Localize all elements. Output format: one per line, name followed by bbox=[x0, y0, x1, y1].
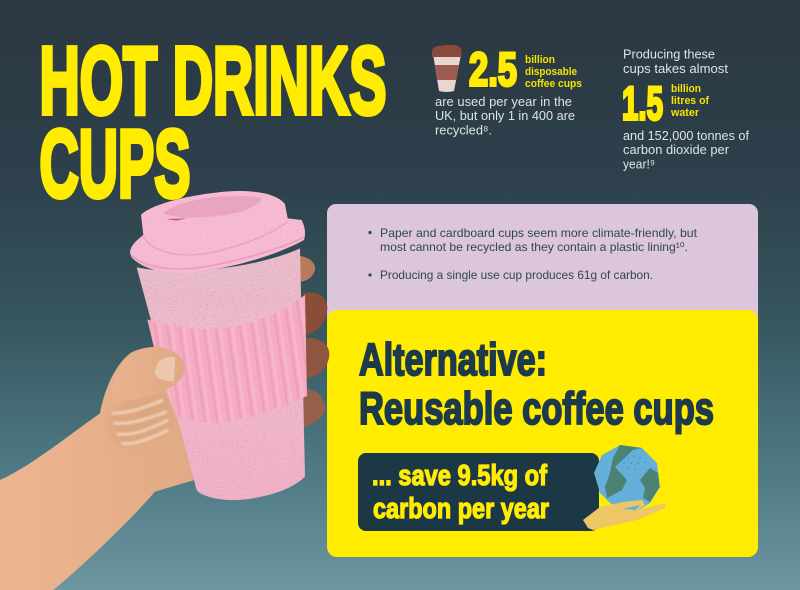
photo: hand holding reusable cup bbox=[0, 190, 329, 590]
text: usage: UK, but only 1 in 400 are bbox=[435, 109, 575, 123]
text: carbon dioxide bbox=[623, 129, 750, 172]
title: HOT DRINKS bbox=[40, 28, 386, 134]
label: billion litres of water bbox=[670, 83, 709, 119]
cup sleeve bbox=[147, 295, 307, 423]
cup lid bbox=[130, 191, 305, 273]
text: intro: cups takes almost bbox=[623, 62, 729, 76]
thumb nail bbox=[154, 357, 175, 381]
bullet list: Paper and cardboard cups seem more climate-friendly, but bbox=[380, 226, 698, 240]
label: billion litres of water: water bbox=[670, 107, 700, 119]
number 2.5: 2.5 bbox=[469, 42, 517, 96]
cup body bbox=[137, 248, 305, 500]
label: billion disposable coffee cups: disposable bbox=[525, 66, 577, 78]
callout: save carbon: carbon per year bbox=[373, 493, 549, 525]
text: intro: Producing these bbox=[623, 48, 715, 62]
text: carbon dioxide: carbon dioxide per bbox=[623, 143, 729, 157]
knuckle shading bbox=[109, 390, 175, 447]
label: billion litres of water: litres of bbox=[671, 95, 709, 107]
label: billion disposable coffee cups bbox=[525, 54, 582, 90]
text: usage bbox=[435, 95, 575, 138]
heading: alternative: Alternative: bbox=[359, 334, 547, 385]
number 1.5: 1.5 bbox=[622, 76, 663, 130]
panel: yellow alternative bbox=[327, 310, 758, 557]
text: usage: recycled⁸. bbox=[435, 124, 492, 138]
heading: alternative bbox=[359, 334, 714, 434]
callout: save carbon bbox=[358, 453, 599, 531]
text: usage: are used per year in the bbox=[435, 95, 572, 109]
text: carbon dioxide: year!⁹ bbox=[623, 158, 655, 172]
bullet list: Producing a single use cup produces 61g of carbon. bbox=[380, 268, 653, 282]
bullet list: most cannot be recycled as they contain a plastic lining¹⁰. bbox=[380, 240, 688, 254]
title bbox=[40, 28, 386, 218]
label: billion disposable coffee cups: coffee cups bbox=[525, 78, 582, 90]
label: billion litres of water: billion bbox=[671, 83, 701, 95]
title: CUPS bbox=[40, 110, 190, 218]
text: carbon dioxide: and 152,000 tonnes of bbox=[623, 129, 750, 143]
panel: lilac facts bbox=[327, 204, 758, 329]
thumb over sleeve bbox=[112, 347, 184, 400]
text: intro bbox=[623, 48, 729, 76]
callout: save carbon: ... save 9.5kg of bbox=[372, 460, 547, 492]
icon: globe in hand bbox=[583, 445, 665, 530]
fingers behind cup bbox=[300, 256, 329, 427]
label: billion disposable coffee cups: billion bbox=[525, 54, 555, 66]
arm and palm bbox=[0, 347, 200, 590]
stat: water and carbon bbox=[622, 48, 750, 172]
icon: takeaway coffee cup bbox=[432, 45, 462, 92]
stat: disposable cups bbox=[432, 42, 582, 138]
bullet list bbox=[368, 226, 698, 282]
